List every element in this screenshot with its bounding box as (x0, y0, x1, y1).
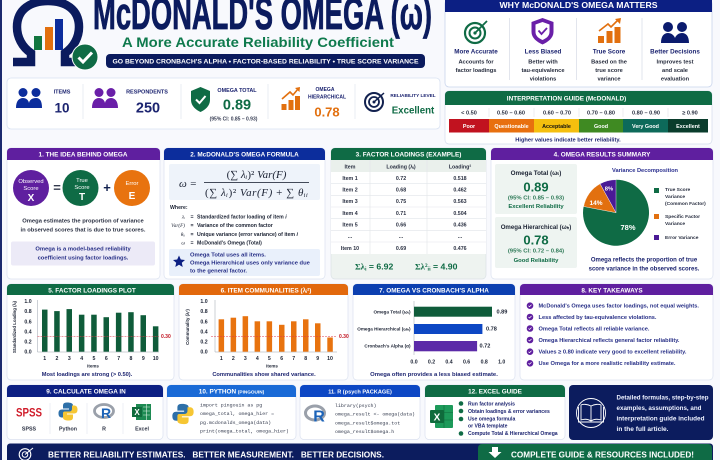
bar chart: 4 (256, 356, 259, 362)
equation: X = T + E: True (76, 178, 88, 184)
table text: Item 4 (342, 211, 358, 217)
panel: interpretation guide: INTERPRETATION GUIDE (McDONALD) (507, 96, 626, 102)
stat: respondents: 250 (136, 100, 160, 116)
where legend: ω (181, 240, 185, 246)
item: less biased: tau-equivalence (522, 68, 564, 74)
where legend: Standardized factor loading of item i (197, 214, 287, 220)
icon: target (365, 93, 384, 111)
table text (341, 164, 471, 252)
where legend: = (190, 214, 194, 220)
scale color bands: Acceptable (542, 124, 571, 130)
panel 12: excel guide: Compute Total & Hierarchical Omega (468, 431, 558, 437)
panel 12: excel guide (425, 385, 565, 440)
equation: X = T + E: T (79, 192, 85, 203)
bar chart: 0.6 (200, 320, 208, 326)
note text (616, 396, 709, 433)
horizontal bar chart: Omega Hierarchical (ωₕ) (357, 326, 411, 332)
horizontal bar chart: 0.2 (428, 360, 435, 366)
item: better decisions: Improves test (657, 60, 694, 66)
item: less biased: violations (530, 76, 556, 82)
note text: interpretation guide included (616, 416, 705, 422)
panel 12: excel guide: Obtain loadings & error variances (468, 409, 550, 415)
scale range labels: 0.50 – 0.60 (497, 110, 525, 116)
item: better decisions: and scale (662, 68, 688, 74)
formula: (∑ λᵢ)² Var(F) + ∑ θᵢᵢ (205, 187, 308, 199)
card: omega hierarchical (495, 217, 577, 268)
bar chart (185, 299, 349, 368)
equation: X = T + E: Score (23, 186, 39, 192)
formula: (∑ λᵢ)² Var(F) (227, 169, 287, 181)
note text: examples, assumptions, and (616, 406, 702, 412)
panel 12: excel guide: Run factor analysis (468, 402, 515, 408)
item: better decisions: evaluation (661, 76, 690, 82)
bar chart: 0.6 (24, 320, 32, 326)
panel 7: omega vs alpha (353, 284, 515, 380)
table text: 0.436 (453, 222, 467, 228)
horizontal bar chart: 0.8 (481, 360, 488, 366)
bar chart: 2 (56, 356, 59, 362)
footer banner: BETTER RELIABILITY ESTIMATES. BETTER MEASUREMENT. BETTER DECISIONS. (48, 450, 384, 460)
table text: 0.72 (396, 176, 406, 182)
panel 3: factor loadings table (331, 148, 486, 279)
pie legend: (Common Factor) (665, 201, 706, 207)
panel: full article note (569, 385, 713, 440)
horizontal bar chart: 1.0 (498, 360, 505, 366)
footer banner (7, 444, 713, 460)
scale color bands: Very Good (632, 124, 659, 130)
horizontal bar chart (357, 301, 507, 366)
scale range labels: 0.80 – 0.90 (632, 110, 660, 116)
where legend: Variance of the common factor (197, 223, 273, 229)
icon: Python (58, 402, 78, 432)
check bullets (527, 302, 533, 367)
card: omega total (495, 164, 577, 214)
card: omega hierarchical: 0.78 (523, 232, 549, 248)
icon: people navy (661, 22, 689, 43)
icon: R (94, 404, 114, 432)
code block: library(psych) (335, 403, 377, 409)
item: less biased (522, 48, 564, 82)
scale range labels: 0.60 – 0.70 (543, 110, 571, 116)
pie chart: variance decomposition: Variance Decomposition (612, 168, 679, 174)
bar chart: 6 (280, 356, 283, 362)
pie legend: Specific Factor (665, 214, 700, 220)
item: true score: variance (597, 76, 621, 82)
card: omega total: Omega Total (ωₜ) (511, 170, 561, 177)
item: true score: Based on the (591, 60, 627, 66)
bar chart: 1.0 (200, 299, 208, 305)
tagline pill: GO BEYOND CRONBACH'S ALPHA • FACTOR-BASED RELIABILITY • TRUE SCORE VARIANCE (112, 60, 418, 66)
stat: items (54, 90, 71, 116)
panel 4: results summary (491, 148, 713, 279)
where legend: = (190, 240, 194, 246)
note text: Detailed formulas, step-by-step (616, 396, 709, 402)
icon: rising chart (282, 87, 300, 110)
stat: items: ITEMS (54, 90, 71, 96)
table text: 0.563 (453, 199, 467, 205)
icon: people navy (16, 88, 42, 108)
bar chart: 1.0 (24, 299, 32, 305)
takeaways text: McDonald's Omega uses factor loadings, not equal weights. (538, 304, 699, 310)
pie legend (654, 187, 706, 241)
panel 11: R psych package (300, 385, 420, 440)
panel 6: item communalities: Communalities show shared variance. (212, 372, 316, 378)
icon: R: R (102, 426, 106, 432)
scale color bands: Good (594, 124, 608, 130)
stat: omega hierarchical: 0.78 (314, 104, 340, 120)
card: omega total: 0.89 (523, 180, 549, 194)
callout (11, 242, 155, 266)
equation: X = T + E: Error (126, 181, 139, 187)
panel 9: calculate omega in (7, 385, 163, 440)
bar chart: 10 (327, 356, 333, 362)
panel 7: omega vs alpha: Omega often provides a less biased estimate. (370, 372, 498, 378)
scale color bands: Questionable (494, 124, 529, 130)
caption: score variance in the observed scores. (589, 266, 700, 272)
table text: Item 1 (342, 176, 358, 182)
code block: omega_total, omega_hier = (200, 411, 274, 417)
panel 12: excel guide: 12. EXCEL GUIDE (468, 388, 523, 396)
panel 2: omega formula: 2. McDONALD'S OMEGA FORMULA (190, 152, 299, 158)
bar chart: 5 (93, 356, 96, 362)
card: omega hierarchical: Omega Hierarchical (ωₕ) (501, 224, 571, 231)
code block: omega_result$omega.tot (335, 420, 400, 426)
code block (335, 403, 415, 435)
caption: Omega reflects the proportion of true (591, 258, 698, 264)
equation: X = T + E: Score (74, 185, 90, 191)
horizontal bar chart: 0.78 (486, 326, 497, 332)
icon: omega logo with bars and check badge (13, 1, 98, 70)
formula (169, 164, 320, 200)
panel 12: excel guide: or VBA template (468, 424, 508, 430)
code block: import pingouin as pg (200, 402, 262, 408)
stat: respondents: RESPONDENTS (126, 90, 168, 96)
stat: reliability level: RELIABILITY LEVEL (390, 93, 436, 98)
table text: 0.518 (453, 176, 467, 182)
table text: 0.504 (453, 211, 467, 217)
icon: Excel (132, 404, 151, 432)
equation: X = T + E: Observed (18, 179, 44, 185)
bar chart: 0.0 (200, 350, 208, 356)
table text: 0.462 (453, 188, 467, 194)
table text: 0.71 (396, 211, 406, 217)
panel 2: omega formula (164, 148, 325, 279)
item: true score (591, 48, 627, 82)
pie legend: Variance (665, 194, 685, 200)
panel 11: R psych package: 11. R (psych PACKAGE) (328, 390, 392, 396)
card: omega total: (95% CI: 0.85 – 0.93) (508, 196, 564, 202)
bar chart: 6 (105, 356, 108, 362)
bar chart: 7 (292, 356, 295, 362)
callout: coefficient using factor loadings. (38, 256, 129, 262)
stat: omega total (210, 88, 258, 122)
bar chart: 0.30 (161, 334, 171, 340)
horizontal bar chart: Cronbach's Alpha (α) (364, 344, 411, 348)
where legend: McDonald's Omega (Total) (197, 240, 262, 246)
where legend: Unique variance (error variance) of item i (197, 232, 298, 238)
equation: X = T + E (13, 170, 150, 206)
table text: 0.66 (396, 222, 406, 228)
panel 5: factor loadings plot (7, 284, 174, 380)
pie chart: variance decomposition: 8% (605, 186, 613, 192)
table text: 0.69 (396, 246, 406, 252)
horizontal bar chart: 0.4 (445, 360, 453, 366)
icon: rising chart orange (598, 18, 621, 43)
item: more accurate: More Accurate (454, 48, 498, 56)
icon: Excel logo: X (434, 412, 441, 424)
panel 5: factor loadings plot: 5. FACTOR LOADINGS PLOT (48, 288, 136, 294)
callout: Omega is a model-based reliability (35, 246, 131, 252)
icon: target green (465, 21, 487, 43)
panel: why omega matters (445, 0, 712, 87)
scale color bands: Poor (463, 124, 476, 130)
icon: people purple (92, 88, 118, 108)
bar chart: 0.2 (24, 340, 32, 346)
icon: target (19, 448, 33, 460)
stat: omega hierarchical: OMEGA (316, 87, 335, 93)
stat: omega hierarchical: HIERARCHICAL (308, 94, 346, 100)
scale range labels: 0.70 – 0.80 (587, 110, 615, 116)
equation: X = T + E: + (103, 180, 111, 195)
panel 6: item communalities: 6. ITEM COMMUNALITIES (λᵢ²) (221, 286, 311, 294)
panel: interpretation guide: Higher values indicate better reliability. (515, 138, 621, 144)
table text: 0.68 (396, 188, 406, 194)
icon: Python: Python (59, 426, 77, 432)
formula: ω = (179, 178, 197, 190)
bar chart: 2 (232, 356, 235, 362)
scale range labels: ≥ 0.90 (682, 110, 698, 116)
horizontal bar chart: 0.89 (496, 310, 507, 316)
code block: omega_result <- omega(data) (335, 412, 415, 418)
bar chart: 1 (220, 356, 223, 362)
panel 6: item communalities (179, 284, 349, 380)
bar chart: 8 (130, 356, 133, 362)
bar chart: 10 (153, 356, 159, 362)
pie chart: variance decomposition: 14% (589, 200, 603, 207)
where legend: = (190, 232, 194, 238)
item: more accurate: Accounts for (458, 60, 494, 66)
table text: 0.476 (453, 246, 467, 252)
icon: SPSS: SPSS (22, 426, 37, 432)
panel 10: python pingouin (167, 385, 296, 440)
panel 1: the idea behind omega (7, 148, 160, 279)
item: less biased: Better with (528, 60, 558, 66)
table text: ... (348, 234, 353, 240)
takeaways text: Omega Hierarchical reflects general factor reliability. (538, 338, 680, 344)
table text: 0.75 (396, 199, 406, 205)
where legend: θᵢᵢ (181, 232, 185, 238)
equation: X = T + E: = (53, 180, 61, 195)
panel 8: key takeaways: 8. KEY TAKEAWAYS (581, 288, 643, 294)
icon: open book (576, 398, 606, 428)
code block: omega_result$omega.h (335, 429, 394, 435)
panel 7: omega vs alpha: 7. OMEGA VS CRONBACH'S ALPHA (379, 288, 489, 294)
panel 4: results summary: 4. OMEGA RESULTS SUMMARY (554, 152, 651, 158)
icon: Excel: Excel (135, 426, 149, 432)
stat: reliability level (390, 93, 436, 116)
bar chart: 9 (316, 356, 319, 362)
panel 10: python pingouin: 10. PYTHON (PINGOUIN) (199, 388, 265, 396)
icon: SPSS: SPSS (16, 406, 42, 420)
caption (589, 258, 700, 272)
panel: key statistics (7, 78, 440, 129)
panel 3: factor loadings table: 3. FACTOR LOADINGS (EXAMPLE) (356, 152, 461, 158)
table text: Item (345, 164, 356, 170)
icon: R logo: R (313, 408, 325, 426)
takeaways text: Values ≥ 0.80 indicate very good to excellent reliability. (538, 350, 687, 356)
takeaways text: Less affected by tau-equivalence violations. (538, 315, 657, 321)
takeaways text: Omega Total reflects all reliable variance. (538, 326, 650, 332)
stat: items: 10 (54, 100, 70, 116)
icon: Python logo (172, 404, 194, 424)
stat: respondents (126, 90, 168, 116)
where legend: = (190, 223, 194, 229)
bar chart: 8 (304, 356, 307, 362)
bar chart: 0.8 (24, 309, 32, 315)
table text: Loading (λᵢ) (386, 164, 416, 170)
scale range labels (461, 110, 698, 116)
pie chart: variance decomposition: 78% (620, 223, 636, 232)
where legend: λᵢ (181, 214, 185, 220)
pie legend: Variance (665, 221, 685, 227)
icon: R: R (101, 405, 111, 421)
card: omega total: Excellent Reliability (508, 204, 564, 210)
icon: shield purple (532, 18, 554, 44)
explanation text: in observed scores that is due to true scores. (20, 228, 146, 234)
stat: omega total: 0.89 (223, 98, 251, 114)
bar chart: 0.4 (24, 330, 32, 336)
pie legend: Error Variance (665, 235, 699, 241)
bar chart: Communality (λᵢ²) (185, 309, 190, 345)
where legend (170, 205, 298, 246)
table text: Loading² (449, 164, 471, 170)
scale color bands: Excellent (676, 124, 700, 130)
horizontal bar chart: Omega Total (ωₜ) (373, 310, 411, 314)
call to action (478, 444, 712, 460)
callout: total vs hierarchical: Omega Total uses all items. (190, 252, 266, 258)
table text: Item 5 (342, 222, 358, 228)
bar chart: 0.30 (339, 334, 349, 340)
explanation text: Omega estimates the proportion of variance (22, 218, 144, 224)
panel 8: key takeaways (520, 284, 713, 380)
bar chart: 7 (117, 356, 120, 362)
bar chart: 0.8 (200, 309, 208, 315)
icon: shield (191, 87, 210, 112)
callout: total vs hierarchical: Omega Hierarchical uses only variance due (190, 260, 311, 266)
callout: total vs hierarchical: to the general factor. (190, 268, 247, 274)
panel 9: calculate omega in: 9. CALCULATE OMEGA IN (46, 388, 126, 396)
table text: Item 3 (342, 199, 358, 205)
bar chart: 9 (142, 356, 145, 362)
bar chart: 3 (244, 356, 247, 362)
where legend: Where: (170, 205, 188, 211)
takeaways text: Use Omega for a more realistic reliability estimate. (538, 361, 676, 367)
bar chart: 0.4 (200, 330, 208, 336)
table text: Item 10 (341, 246, 359, 252)
bar chart: 0.2 (200, 340, 208, 346)
horizontal bar chart: 0.0 (410, 360, 418, 366)
stat: omega hierarchical (308, 87, 346, 120)
bar chart (12, 299, 171, 368)
where legend: Var(F) (171, 222, 185, 229)
item: better decisions (650, 48, 700, 82)
item: true score: true score (595, 68, 623, 74)
icon: SPSS (16, 406, 42, 432)
code block: print(omega_total, omega_hier) (200, 428, 289, 434)
call to action: COMPLETE GUIDE & RESOURCES INCLUDED! (511, 450, 694, 460)
pie chart: variance decomposition (583, 168, 679, 246)
item: less biased: Less Biased (525, 48, 562, 56)
panel 1: the idea behind omega: 1. THE IDEA BEHIND OMEGA (39, 152, 128, 158)
item: more accurate: factor loadings (456, 68, 496, 74)
takeaways text (538, 304, 699, 367)
code block (200, 402, 289, 434)
equation: X = T + E: X (28, 193, 35, 204)
subtitle: A More Accurate Reliability Coefficient (122, 34, 394, 50)
bar chart: Items (266, 364, 278, 368)
code block: pg.mcdonalds_omega(data) (200, 420, 271, 426)
panel: interpretation guide (445, 91, 712, 144)
callout: total vs hierarchical (169, 249, 320, 276)
pie legend: True Score (665, 187, 691, 193)
icon: Excel: X (134, 408, 140, 417)
panel 5: factor loadings plot: Most loadings are strong (> 0.50). (42, 372, 133, 378)
note text: in the full article. (616, 427, 669, 433)
table sums: Σλ²ᵢᵢ = 4.90 (415, 262, 458, 272)
bar chart: 0.0 (24, 350, 32, 356)
item: better decisions: Better Decisions (650, 48, 700, 56)
panel 12: excel guide: Use omega formula (468, 416, 515, 422)
scale range labels: < 0.50 (461, 110, 477, 116)
table text: ... (458, 234, 463, 240)
item: true score: True Score (593, 48, 626, 56)
bar chart: 5 (268, 356, 271, 362)
stat: reliability level: Excellent (392, 106, 435, 116)
stat: omega total: (95% CI: 0.85 – 0.93) (210, 116, 258, 122)
horizontal bar chart: 0.6 (463, 360, 470, 366)
table sums: Σλᵢ = 6.92 (355, 262, 393, 272)
stat: omega total: OMEGA TOTAL (217, 88, 257, 94)
item: more accurate (454, 48, 498, 74)
table text: ... (399, 234, 404, 240)
bar chart: 3 (68, 356, 71, 362)
table sums (355, 262, 458, 272)
bar chart: 1 (43, 356, 46, 362)
bar chart: 4 (80, 356, 83, 362)
equation: X = T + E: E (129, 191, 136, 202)
scale color bands (449, 119, 708, 132)
checklist (459, 401, 463, 436)
card: omega hierarchical: Good Reliability (514, 258, 559, 264)
horizontal bar chart: 0.72 (480, 344, 490, 350)
card: omega hierarchical: (95% CI: 0.72 – 0.84) (508, 248, 564, 254)
bar chart: Items (87, 364, 99, 368)
tagline pill (106, 54, 425, 68)
panel: why omega matters: WHY McDONALD'S OMEGA MATTERS (500, 1, 658, 10)
table text: Item 2 (342, 188, 358, 194)
bar chart: Standardized Loading (λᵢ) (12, 300, 17, 353)
explanation text (20, 218, 146, 234)
